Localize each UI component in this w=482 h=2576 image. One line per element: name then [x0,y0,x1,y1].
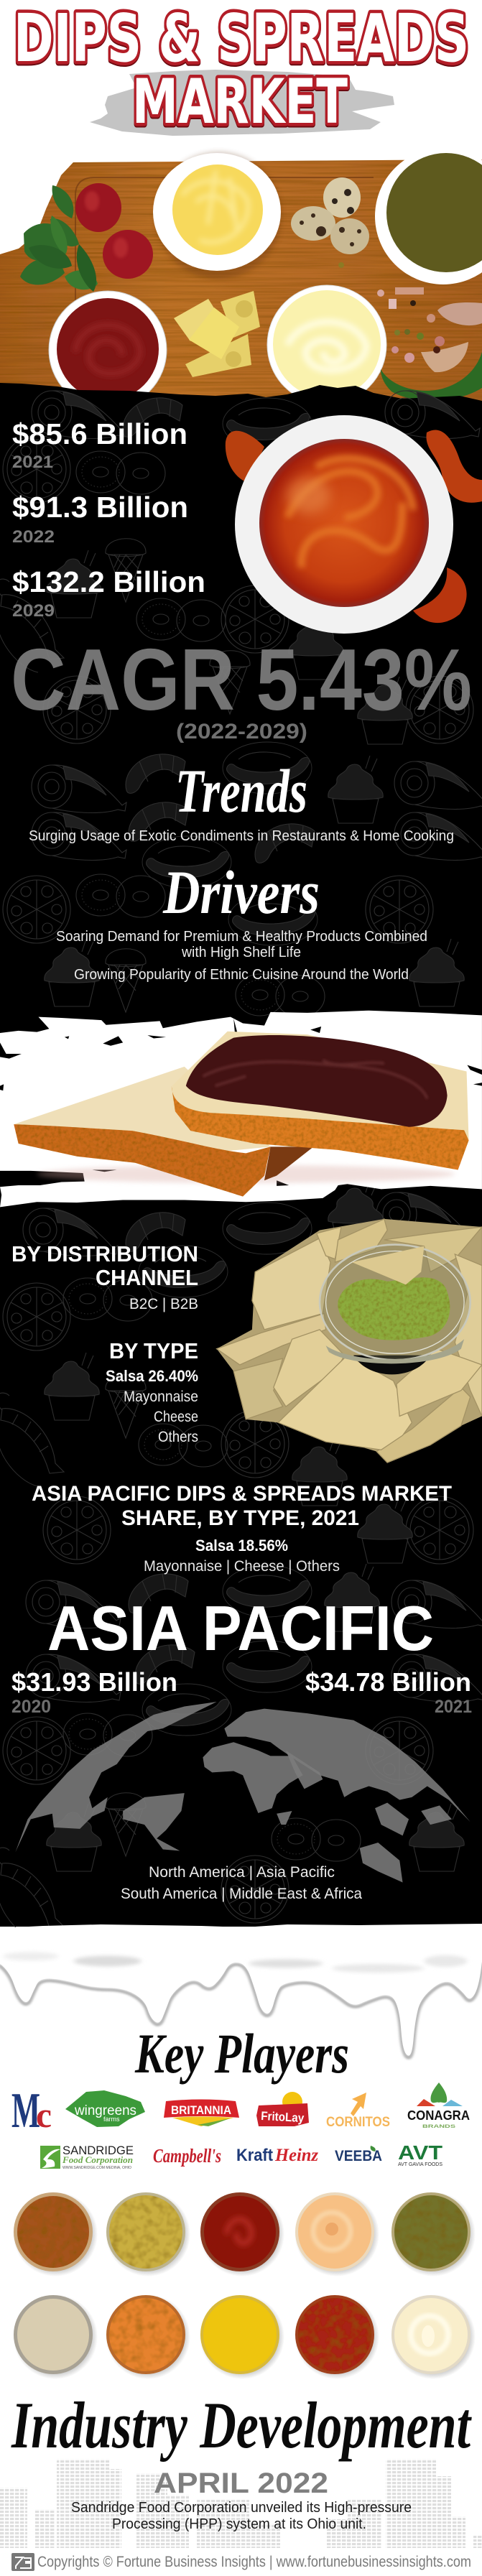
green chili [381,352,482,401]
quail eggs [291,177,369,254]
market size stat 2022 [12,491,188,547]
torn paper band [0,1011,482,1207]
logo: Kraft Heinz: Kraft [236,2146,273,2165]
torn white band with bread [0,1011,482,1207]
logo: Kraft Heinz [236,2146,318,2165]
regional value 2021 [305,1667,472,1717]
bowl: tahini [13,2294,98,2379]
logo: Wingreens Farms: farms [103,2116,120,2123]
distribution channel segment [11,1241,198,1312]
logo: AVT Gavia Foods: AVT [398,2141,442,2164]
type segment [106,1338,198,1445]
type segment: Salsa 26.40% [106,1367,198,1385]
development text: Processing (HPP) system at its Ohio unit. [112,2516,366,2532]
bowl: peach dip [295,2192,379,2276]
logo: Sandridge Food Corporation: SANDRIDGE [62,2144,134,2157]
logo: Sandridge Food Corporation: WWW.SANDRIDGE.COM MEDINA, OHIO [62,2166,131,2170]
trends heading: Trends [175,756,307,825]
logo: Britannia: BRITANNIA [171,2103,231,2117]
trends text: Surging Usage of Exotic Condiments in Restaurants & Home Cooking [29,828,454,844]
logo: Campbell's: Campbell's [153,2145,221,2167]
regional value 2020: 2020 [11,1697,51,1717]
world map globe [15,1702,471,1882]
distribution channel segment: BY DISTRIBUTION [11,1241,198,1266]
logo: Wingreens Farms [65,2090,145,2127]
food doodle pattern [0,391,482,1941]
icon: Fortune Business Insights logo [11,2553,34,2571]
logo: McCormick: M [11,2083,40,2139]
distribution channel segment: CHANNEL [96,1265,198,1290]
company logos [11,2082,470,2170]
logo: Sandridge Food Corporation [40,2144,134,2170]
wooden board [0,159,482,404]
regional value 2020: $31.93 Billion [11,1667,177,1697]
bowl: pesto [391,2192,476,2276]
ketchup bowl [49,291,167,409]
logo: Cornitos: CORNITOS [326,2115,390,2130]
logo: McCormick: c [36,2095,52,2135]
regions list: South America | Middle East & Africa [121,1886,362,1902]
logo: Britannia [164,2099,239,2126]
regions list: North America | Asia Pacific [149,1864,335,1881]
bowl: yellow mustard [200,2294,284,2379]
market size stat 2022: 2022 [12,527,55,547]
cutting board scene [0,148,482,409]
regions list [121,1864,362,1902]
milk drip [0,1937,482,2058]
market size stat 2029 [12,565,205,621]
bowl: mayonnaise [391,2294,476,2379]
market size stat 2022: $91.3 Billion [12,491,188,524]
market size stat 2029: $132.2 Billion [12,565,205,598]
footer [11,2553,471,2571]
type segment: Mayonnaise [124,1389,198,1405]
type segment: BY TYPE [109,1338,198,1363]
market size stat 2029: 2029 [12,601,55,621]
asia pacific type share heading: ASIA PACIFIC DIPS & SPREADS MARKET [32,1482,452,1506]
drivers text: Growing Popularity of Ethnic Cuisine Around the World [74,967,409,983]
market size stat 2021 [12,417,187,472]
asia pacific heading: ASIA PACIFIC [47,1593,434,1664]
title brush stroke [90,70,394,136]
asia pacific type share list [144,1537,340,1575]
black background [0,383,482,1927]
creamy mayonnaise bowl [267,285,386,404]
logo: Wingreens Farms: wingreens [74,2103,136,2118]
garlic and spices [338,262,482,372]
bowl: tomato salsa [295,2294,379,2379]
logo: Frito Lay: FritoLay [261,2109,305,2125]
mayonnaise bowl [153,152,282,279]
market size stat 2021: 2021 [12,453,53,472]
CAGR figure: (2022-2029) [176,720,307,743]
nachos and guacamole [217,1219,482,1463]
development date: APRIL 2022 [154,2468,328,2499]
asia pacific type share list: Salsa 18.56% [195,1537,288,1555]
asia pacific type share heading [32,1482,452,1530]
bowl: orange chutney [106,2294,190,2379]
green sauce bowl [375,148,482,284]
drivers heading: Drivers [162,858,320,927]
logo: Sandridge Food Corporation: Food Corporation [62,2154,133,2165]
market size stat 2021: $85.6 Billion [12,417,187,450]
board groove [75,177,374,386]
drivers text: Soaring Demand for Premium & Healthy Products Combined [56,929,427,945]
bowl: meat sauce [13,2192,98,2276]
logo: Conagra Brands: CONAGRA [407,2108,470,2123]
sauce bowls row one [13,2192,476,2276]
cheese cubes [174,291,260,377]
logo: Conagra Brands [407,2082,470,2129]
distribution channel segment: B2C | B2B [129,1296,198,1312]
bread slices and spread [14,1032,469,1197]
bowl: ketchup [200,2192,284,2276]
logo: Conagra Brands: BRANDS [422,2125,455,2129]
type segment: Others [158,1429,198,1445]
logo: Veeba: VEEBA [335,2148,382,2164]
red sauce bowl [226,415,482,634]
white torn lower edge [0,1924,482,1940]
key players heading: Key Players [134,2022,349,2085]
title line two: MARKET [132,66,348,138]
city skyline [0,2459,482,2548]
bowl: mustard relish [106,2192,190,2276]
logo: AVT Gavia Foods: AVT GAVIA FOODS [398,2161,442,2167]
asia pacific type share heading: SHARE, BY TYPE, 2021 [121,1506,359,1530]
tomatoes [75,183,153,279]
logo: Cornitos [326,2093,390,2130]
regional value 2021: 2021 [435,1697,472,1717]
development text [71,2500,412,2532]
sauce bowls row two [13,2294,476,2379]
logo: Frito Lay [256,2092,309,2126]
title [14,0,469,138]
drivers text: with High Shelf Life [181,945,301,960]
drivers text [56,929,427,983]
dark main panel [0,383,482,1941]
regional value 2020 [11,1667,177,1717]
basil leaves [20,185,98,292]
logo: Kraft Heinz: Heinz [274,2146,318,2165]
asia pacific type share list: Mayonnaise | Cheese | Others [144,1558,340,1575]
development text: Sandridge Food Corporation unveiled its High-pressure [71,2500,412,2516]
type segment: Cheese [154,1409,198,1425]
regional value 2021: $34.78 Billion [305,1667,471,1697]
